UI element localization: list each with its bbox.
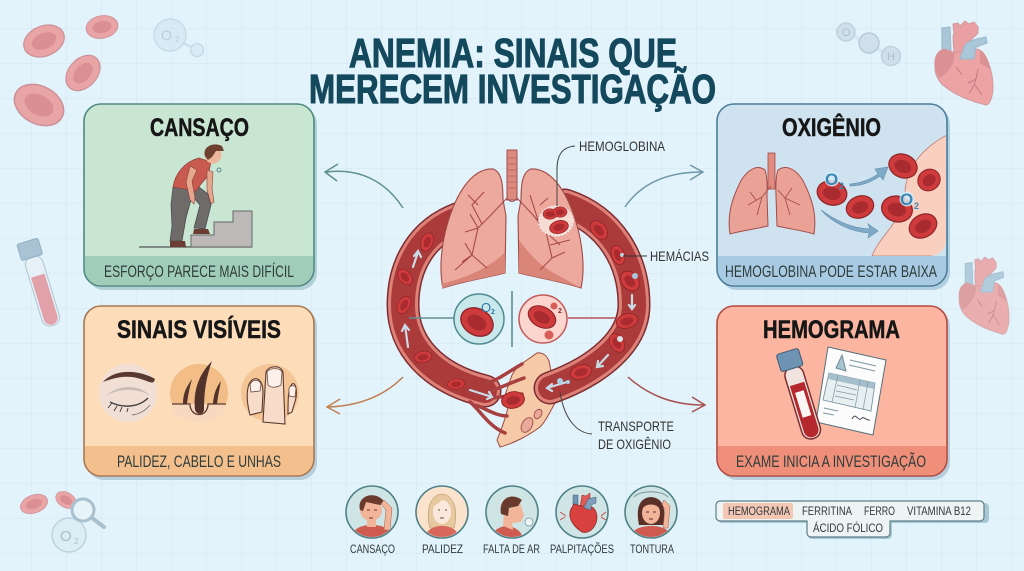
panel: cansaço [84,104,317,290]
right vessel [550,205,634,388]
symptom: falta de ar [483,486,540,556]
heading: sinais visíveis: SINAIS VISÍVEIS [117,315,281,344]
label: PALPITAÇÕES [550,541,614,556]
caption: sinais visíveis: PALIDEZ, CABELO E UNHAS [117,452,281,471]
legend: exames [716,501,989,539]
caption: oxigênio: HEMOGLOBINA PODE ESTAR BAIXA [725,262,937,281]
label: transporte de oxigênio: DE OXIGÊNIO [598,436,671,452]
decor: molecule top right: O [842,27,851,39]
legend: exames: FERRO [864,504,895,518]
label: hemoglobina: HEMOGLOBINA [579,138,666,154]
icon: lab report [816,347,886,435]
panel: hemograma [717,306,950,480]
diagram: circulation ring with lungs [394,150,643,447]
symptom: cansaço [346,486,398,556]
label: CANSAÇO [350,542,395,556]
label: transporte de oxigênio: TRANSPORTE [598,418,674,434]
label: TONTURA [630,542,674,556]
icon: blood test tube [776,348,825,442]
symptom: palpitações [550,486,614,556]
decor: red blood cells top left [7,13,120,134]
decor: heart top right [935,21,993,105]
icon: red cells and oxygen [814,150,944,243]
arrow: to sinais visíveis [327,377,403,414]
decor: O2 molecule top [154,19,204,56]
arrow: to hemograma [628,377,705,412]
caption: cansaço: ESFORÇO PARECE MAIS DIFÍCIL [104,262,294,281]
icon: hair follicle [170,361,228,422]
title: ANEMIA: SINAIS QUE [349,30,677,76]
label: PALIDEZ [422,542,463,556]
divider [511,291,513,347]
callout: cell with oxygen: 2 [491,309,495,316]
tissue [497,353,555,447]
legend: exames: ÁCIDO FÓLICO [813,520,883,535]
decor: cells, magnifier and O2 bottom left: 2 [74,537,79,546]
label: FALTA DE AR [483,542,540,556]
icon: lungs [729,153,815,234]
icon: red cells and oxygen: O [900,190,913,209]
icon: red cells and oxygen: 2 [914,201,919,211]
title: MERECEM INVESTIGAÇÃO [309,66,716,112]
callout: cell with oxygen [409,294,504,344]
heading: oxigênio: OXIGÊNIO [782,112,881,142]
label: hemoglobina [557,138,666,206]
title [309,30,716,112]
decor: O2 molecule top: 2 [175,35,180,44]
arrow: to oxigênio [625,165,703,207]
capillary branches [470,364,524,433]
legend: exames: HEMOGRAMA [728,504,790,518]
label: hemácias [623,248,709,264]
label: hemácias: HEMÁCIAS [650,248,709,264]
panel: oxigênio [717,104,950,290]
flow arrows [402,251,635,399]
label: transporte de oxigênio [560,392,674,452]
decor: test tube left [17,238,63,329]
arrow: to cansaço [325,164,403,208]
icon: pale eye [99,364,157,422]
icon: red cells and oxygen: O [825,170,838,189]
legend: exames: VITAMINA B12 [907,504,971,518]
left vessel [403,218,485,391]
caption: hemograma: EXAME INICIA A INVESTIGAÇÃO [736,452,926,471]
icon: man climbing stairs [139,144,252,247]
lung alveoli with red cells [539,206,573,236]
decor: molecule top right [837,23,900,66]
decor: cells, magnifier and O2 bottom left: O [60,528,72,545]
symptom: palidez [416,486,468,556]
cells in vessels [394,217,643,410]
decor: molecule top right: H [887,51,895,63]
panel: sinais visíveis [84,306,317,480]
decor: heart right [959,257,1009,334]
icon: red cells and oxygen: 2 [839,181,844,191]
decor: cells, magnifier and O2 bottom left [18,488,104,552]
icon: fingernails [241,364,299,424]
callout: cell with low oxygen: 2 [558,308,562,315]
legend: exames: FERRITINA [802,504,852,518]
callout: cell with low oxygen [519,295,615,343]
callout: cell with oxygen: O [481,300,491,315]
lungs [441,150,583,288]
heading: cansaço: CANSAÇO [150,114,249,142]
symptom: tontura [625,486,677,556]
heading: hemograma: HEMOGRAMA [763,316,900,344]
decor: O2 molecule top: O [161,27,172,43]
